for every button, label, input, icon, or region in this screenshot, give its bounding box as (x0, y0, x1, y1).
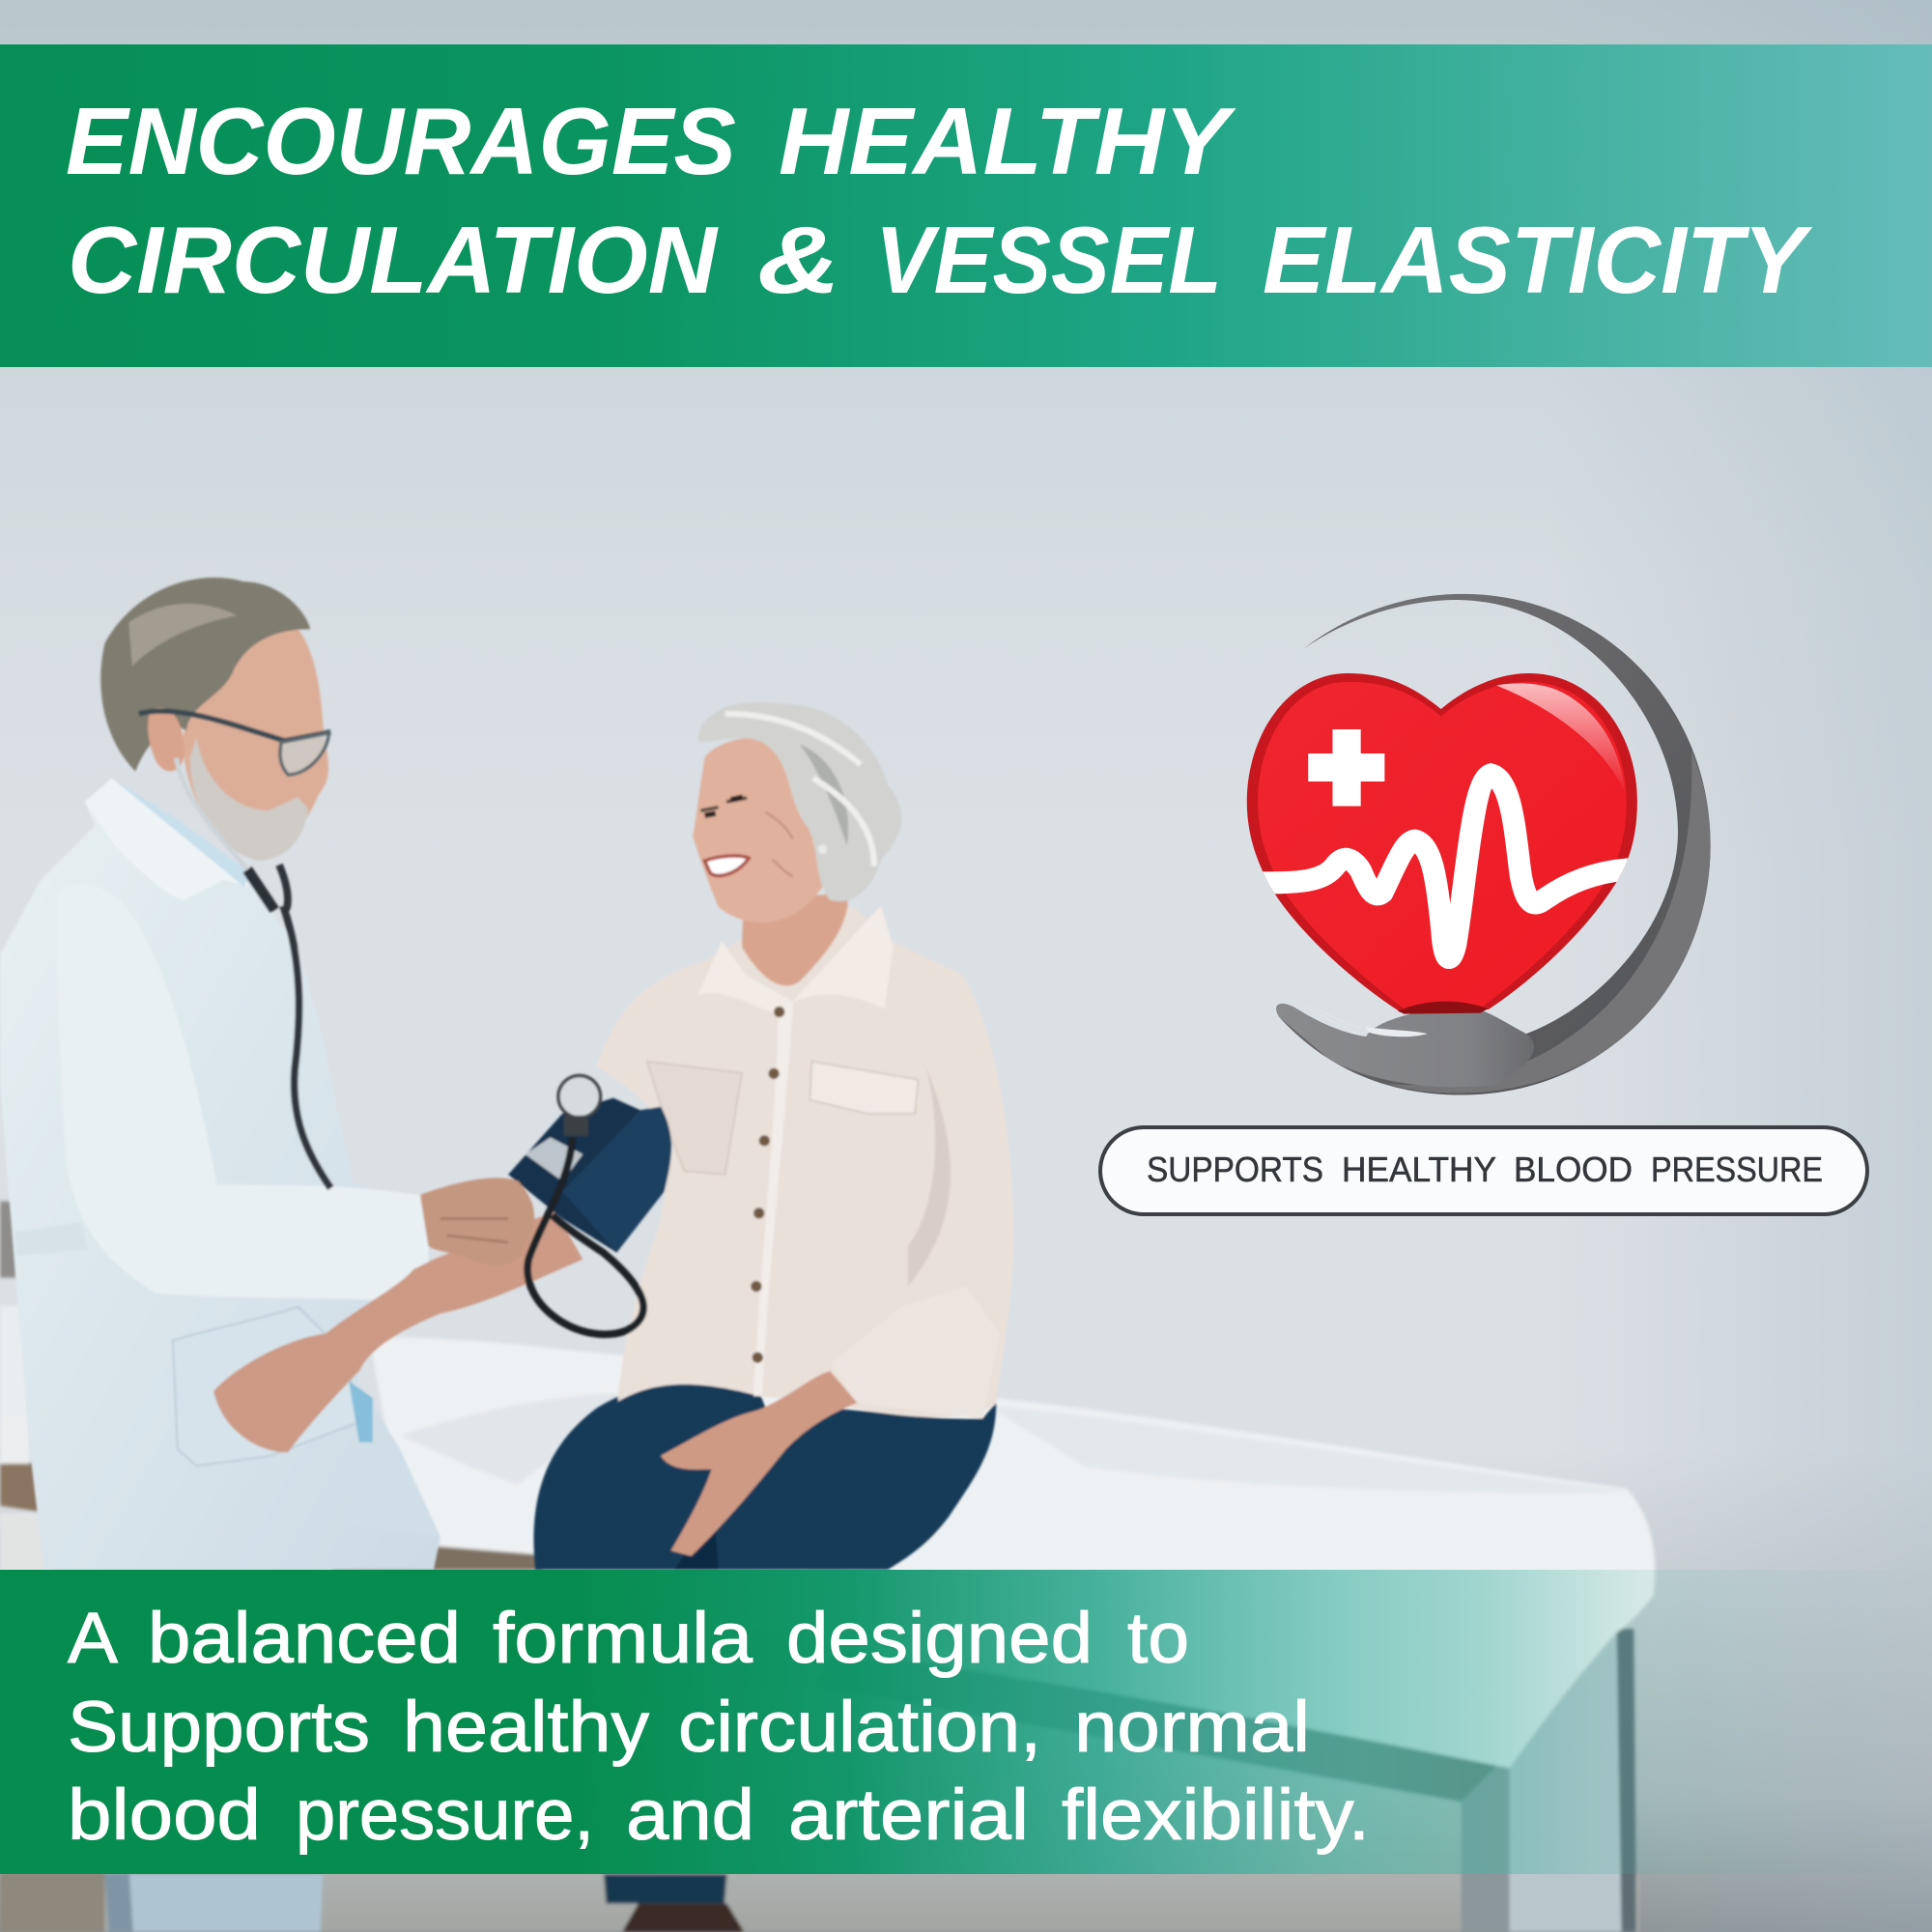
callout: supports healthy blood pressure: PRESSURE (1651, 1150, 1823, 1189)
bottom description text: and (626, 1775, 754, 1855)
patient head and hair (693, 702, 901, 923)
bottom description text: A (68, 1598, 119, 1678)
title: VESSEL (875, 207, 1222, 313)
callout: supports healthy blood pressure (1100, 1127, 1867, 1214)
title: & (757, 207, 840, 313)
bottom description text: blood (68, 1775, 261, 1855)
callout: supports healthy blood pressure: HEALTHY (1342, 1150, 1496, 1189)
title: CIRCULATION (68, 207, 719, 313)
title: HEALTHY (779, 88, 1236, 194)
blood pressure cuff and gauge (508, 1075, 671, 1334)
stethoscope (176, 757, 330, 1188)
doctor hand (420, 1178, 534, 1265)
patient hand on knee (661, 1371, 857, 1556)
top title band (0, 44, 1932, 367)
bottom description text: arterial (788, 1775, 1029, 1855)
bottom description text: pressure, (296, 1775, 594, 1855)
doctor coat (0, 779, 440, 1570)
patient jeans (534, 1382, 996, 1570)
icon: grey ring and hand (1276, 594, 1711, 1095)
title: ENCOURAGES (66, 88, 736, 194)
bottom description text: circulation, (678, 1687, 1041, 1767)
bottom text band (0, 1570, 1932, 1874)
title: ELASTICITY (1263, 207, 1813, 313)
callout: supports healthy blood pressure: SUPPORTS (1147, 1150, 1323, 1189)
icon: heart in caring hand (1247, 594, 1711, 1095)
patient blouse (596, 894, 1013, 1418)
icon: heartbeat line (1247, 775, 1637, 958)
bottom description text: normal (1074, 1687, 1310, 1767)
bottom description text: healthy (403, 1687, 649, 1767)
icon: white medical cross (1308, 729, 1384, 806)
photo: examination table (0, 1202, 1655, 1932)
doctor head with beard and glasses (100, 578, 330, 861)
icon: red heart (1247, 673, 1637, 1014)
bottom description text: Supports (68, 1687, 370, 1767)
bottom description text: formula (493, 1598, 753, 1678)
bottom description text: flexibility. (1062, 1775, 1370, 1855)
callout: supports healthy blood pressure: BLOOD (1514, 1150, 1633, 1189)
patient forearm (213, 1211, 582, 1453)
bottom description text: designed (786, 1598, 1093, 1678)
title (66, 88, 1813, 313)
bottom description text: to (1127, 1598, 1189, 1678)
bottom description text (68, 1598, 1370, 1855)
photo: doctor and patient (0, 578, 1013, 1570)
bottom description text: balanced (148, 1598, 461, 1678)
